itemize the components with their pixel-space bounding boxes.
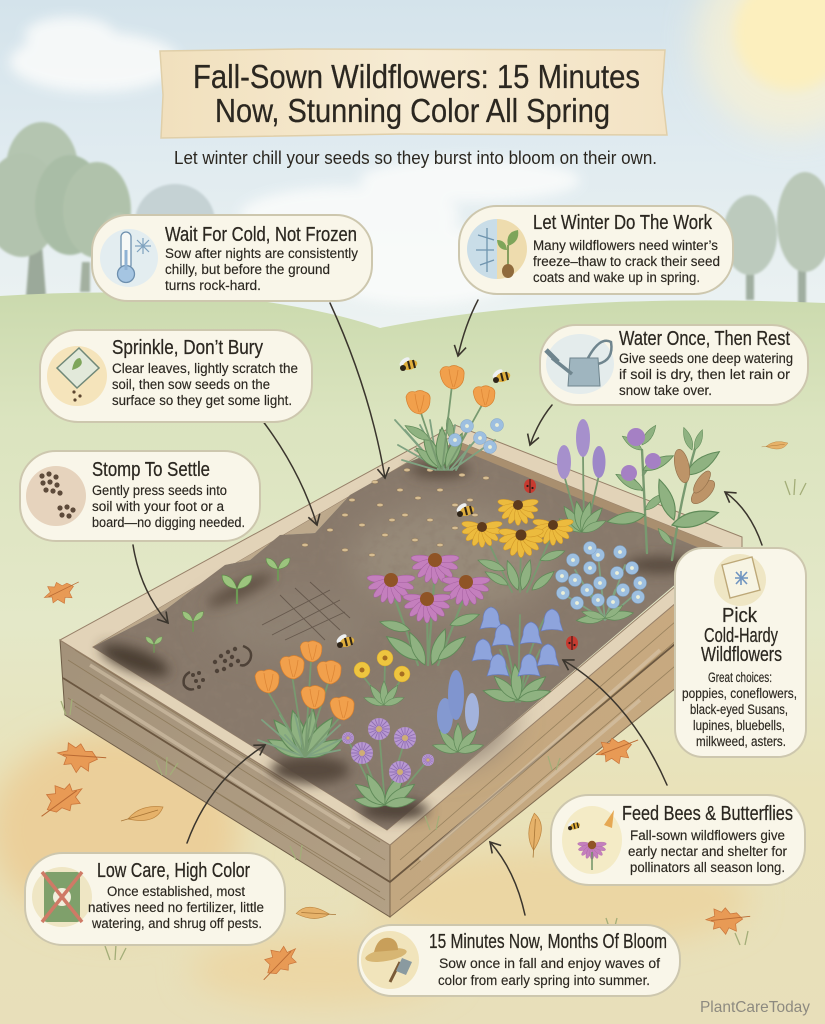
- text: Fall-sown wildflowers give: [630, 828, 785, 843]
- sky: [0, 0, 825, 340]
- text: natives need no fertilizer, little: [88, 900, 264, 915]
- sun: [695, 0, 825, 135]
- text: freeze–thaw to crack their seed: [533, 254, 720, 269]
- plant: back poppies and blue flowers: [395, 366, 504, 471]
- plant: lavender: [557, 419, 608, 535]
- seedlings: [146, 558, 290, 653]
- warm ground patches: [0, 730, 750, 1005]
- text: Great choices:: [708, 670, 772, 685]
- plant: milkweed and asters: [606, 423, 723, 560]
- callout: low care: [25, 853, 285, 945]
- subtitle: Let winter chill your seeds so they burst into bloom on their own.: [174, 148, 657, 168]
- footprints: [184, 646, 251, 690]
- text: soil with your foot or a: [92, 499, 224, 514]
- text: Gently press seeds into: [92, 483, 227, 498]
- icon: thermometer: [100, 229, 158, 287]
- text: Water Once, Then Rest: [619, 328, 790, 350]
- title banner: [160, 49, 667, 138]
- plant: lupines: [432, 670, 484, 756]
- text: black-eyed Susans,: [690, 702, 788, 717]
- icon: watering can: [546, 334, 614, 394]
- text: [429, 931, 667, 988]
- text: 15 Minutes Now, Months Of Bloom: [429, 931, 667, 953]
- title text: Fall-Sown Wildflowers: 15 Minutes: [193, 58, 640, 95]
- text: [682, 605, 797, 749]
- text: milkweed, asters.: [696, 734, 786, 749]
- plant: front poppies: [255, 641, 354, 762]
- text: [165, 224, 358, 293]
- text: watering, and shrug off pests.: [91, 916, 262, 931]
- plant: bluebells: [472, 607, 563, 705]
- text: [92, 459, 245, 530]
- plant: purple asters: [342, 718, 434, 809]
- ground: [0, 292, 825, 1024]
- watermark: PlantCareToday: [700, 999, 810, 1016]
- callout: wait for cold: [92, 215, 372, 301]
- rake marks: [262, 582, 350, 640]
- plant: coneflowers: [367, 553, 490, 667]
- text: Once established, most: [107, 884, 245, 899]
- plant: forget-me-nots: [556, 542, 646, 625]
- icon: seed packet: [714, 554, 766, 606]
- text: pollinators all season long.: [630, 860, 785, 875]
- icon: seed packet: [47, 346, 107, 406]
- text: chilly, but before the ground: [165, 262, 330, 277]
- callout: pick cold-hardy wildflowers: [675, 548, 806, 757]
- title text: [193, 58, 640, 129]
- text: [533, 212, 720, 285]
- text: Wait For Cold, Not Frozen: [165, 224, 357, 246]
- text: Many wildflowers need winter’s: [533, 238, 718, 253]
- text: early nectar and shelter for: [628, 844, 787, 859]
- bed right face: [390, 540, 742, 917]
- icon: fertilizer bag crossed out: [32, 867, 92, 927]
- text: Sow after nights are consistently: [165, 246, 358, 261]
- text: Cold-Hardy: [704, 625, 778, 647]
- text: [88, 860, 264, 931]
- text: Low Care, High Color: [97, 860, 250, 882]
- raised garden bed: [60, 425, 742, 917]
- plant: yellow daisies: [354, 650, 410, 708]
- text: Give seeds one deep watering: [619, 351, 793, 366]
- text: color from early spring into summer.: [438, 973, 650, 988]
- callout: water once: [540, 325, 808, 405]
- icon: boot prints: [26, 466, 86, 526]
- text: Wildflowers: [701, 644, 782, 666]
- grass tufts: [61, 479, 806, 960]
- text: soil, then sow seeds on the: [112, 377, 270, 392]
- fallen leaves: [33, 438, 788, 983]
- text: [622, 803, 793, 875]
- text: board—no digging needed.: [92, 515, 245, 530]
- callout: stomp to settle: [20, 451, 260, 541]
- clouds: [10, 17, 580, 305]
- soil: [93, 445, 712, 830]
- text: [619, 328, 793, 398]
- scattered seeds: [302, 468, 489, 557]
- bed left face: [60, 640, 390, 917]
- callout: feed bees and butterflies: [551, 795, 805, 885]
- callout: let winter do the work: [459, 206, 733, 294]
- text: poppies, coneflowers,: [682, 686, 797, 701]
- text: if soil is dry, then let rain or: [619, 367, 791, 382]
- icon: bee, butterfly, coneflower: [562, 806, 622, 874]
- text: snow take over.: [619, 383, 712, 398]
- icon: sun hat and trowel: [361, 931, 419, 989]
- text: Let Winter Do The Work: [533, 212, 713, 234]
- text: Clear leaves, lightly scratch the: [112, 361, 298, 376]
- plant: black-eyed Susans: [461, 498, 574, 593]
- text: turns rock-hard.: [165, 278, 261, 293]
- text: Sprinkle, Don’t Bury: [112, 337, 263, 359]
- icon: half snow, half sprout: [467, 219, 527, 279]
- text: Sow once in fall and enjoy waves of: [439, 956, 660, 971]
- trees left: [0, 122, 215, 296]
- callout: sprinkle: [40, 330, 312, 422]
- text: surface so they get some light.: [112, 393, 292, 408]
- callout: 15 minutes: [358, 925, 680, 996]
- text: coats and wake up in spring.: [533, 270, 700, 285]
- text: Stomp To Settle: [92, 459, 210, 481]
- pollinators: bees and ladybugs: [335, 356, 578, 650]
- text: Pick: [722, 605, 758, 627]
- trees right: [723, 172, 825, 305]
- arrows: [133, 300, 762, 915]
- text: [112, 337, 298, 408]
- text: lupines, bluebells,: [693, 718, 785, 733]
- bed rim: [60, 425, 742, 845]
- title text: Now, Stunning Color All Spring: [215, 92, 610, 129]
